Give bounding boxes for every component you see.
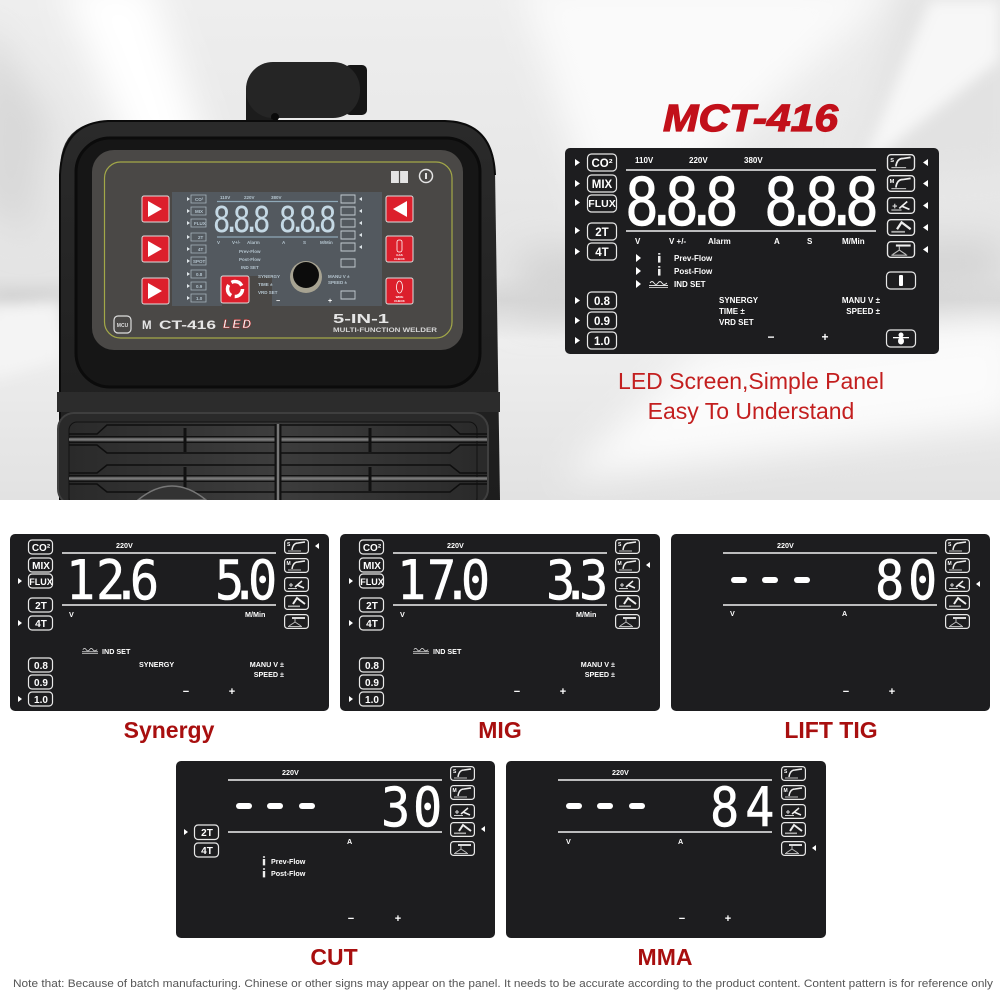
embedded LCD screen: 0.8 [196, 272, 203, 277]
settings labels: MANU V ± [842, 296, 881, 305]
panel: MIG display: + [560, 686, 566, 698]
digits: 8.8.8 [764, 165, 879, 241]
embedded LCD screen: IND SET [241, 265, 259, 270]
red buttons: CHECK [394, 299, 406, 303]
embedded LCD screen: 380V [271, 195, 282, 200]
readout: 5.0 [215, 550, 277, 613]
panel: MIG display: 0.8 [365, 661, 379, 672]
embedded LCD screen: CO² [195, 197, 204, 202]
mode buttons: 1.0 [594, 336, 610, 348]
readout: 17.0 [397, 550, 490, 613]
panel branding: 5-IN-1 [333, 311, 389, 326]
panel: LIFT TIG display: 220V [777, 541, 794, 550]
settings labels: + [821, 330, 829, 344]
embedded LCD screen: 8.8.8 [279, 199, 336, 241]
panel: CUT display: Post-Flow [271, 869, 306, 878]
ventilation grille [58, 413, 488, 506]
embedded LCD screen: M/Min [320, 240, 333, 245]
panel branding [114, 311, 438, 334]
mode buttons: CO² [591, 158, 613, 170]
embedded LCD screen: MIX [195, 209, 203, 214]
unit labels: V +/- [669, 237, 686, 246]
panel: CUT display: 2T [201, 828, 213, 839]
readout [731, 550, 937, 613]
panel branding: MCU [117, 323, 129, 329]
panel: CUT display: + [395, 913, 401, 925]
panel: LIFT TIG display: A [842, 609, 847, 618]
mode buttons: FLUX [588, 198, 616, 210]
embedded LCD screen: SPEED ± [328, 280, 348, 285]
panel: Synergy display: M/Min [245, 610, 265, 619]
settings labels: TIME ± [719, 307, 745, 316]
mode buttons: 0.9 [594, 316, 610, 328]
panel: Synergy display: 0.9 [34, 678, 48, 689]
voltage labels [635, 156, 763, 165]
embedded LCD screen: 8.8.8 [213, 199, 270, 241]
unit labels [635, 237, 865, 246]
captions row 2: CUT [310, 944, 358, 970]
footnote: Note that: Because of batch manufacturing. Chinese or other signs may appear on the panel. It needs to be accurate according to the product content. Content pattern is for reference only [13, 978, 993, 990]
panel: MMA display: V [566, 837, 571, 846]
readout [66, 550, 277, 613]
embedded LCD screen: FLUX [194, 221, 206, 226]
panel: MIG display: − [514, 686, 520, 698]
title: MCT-416: MCT-416 [663, 98, 839, 140]
embedded LCD screen: Post-Flow [239, 257, 261, 262]
panel: CUT display: − [348, 913, 354, 925]
panel: MIG display: IND SET [433, 647, 462, 656]
mode buttons [575, 154, 616, 349]
embedded LCD screen: TIME ± [258, 282, 273, 287]
indicators: Post-Flow [674, 267, 713, 276]
panel: Synergy display: 1.0 [34, 695, 48, 706]
red buttons: CHECK [394, 257, 406, 261]
mode buttons: 2T [595, 227, 609, 239]
panel: Synergy display: MANU V ± [250, 660, 284, 669]
subtitle: LED Screen,Simple Panel [618, 368, 884, 394]
readout: 3.3 [546, 550, 608, 613]
embedded LCD screen: 2T [198, 235, 204, 240]
panel: MIG display: 220V [447, 541, 464, 550]
settings labels: SPEED ± [846, 307, 881, 316]
captions row 1 [124, 717, 878, 743]
captions row 1: LIFT TIG [784, 717, 878, 743]
settings labels: VRD SET [719, 318, 754, 327]
panel: Synergy display: FLUX [29, 577, 53, 587]
knob [290, 261, 322, 293]
panel: Synergy display: + [229, 686, 235, 698]
icon: manual and power [391, 170, 432, 183]
embedded LCD screen: 110V [220, 195, 230, 200]
embedded LCD screen: Prev-Flow [239, 249, 261, 254]
subtitle [618, 368, 884, 424]
panel: Synergy display: CO² [32, 543, 51, 554]
readout: 80 [875, 550, 937, 613]
panel: Synergy display [10, 534, 329, 711]
handle [246, 62, 367, 122]
embedded LCD screen: 1.0 [196, 296, 203, 301]
digits: 8.8.8 [625, 165, 739, 241]
embedded LCD screen [172, 192, 382, 306]
panel: MIG display: CO² [363, 543, 382, 554]
panel: MIG display: M/Min [576, 610, 596, 619]
readout [566, 777, 774, 840]
captions row 1: MIG [478, 717, 522, 743]
indicators: IND SET [674, 280, 706, 289]
panel: LIFT TIG display: V [730, 609, 735, 618]
embedded LCD screen: 0.9 [196, 284, 203, 289]
readout: 12.6 [66, 550, 159, 613]
panel: CUT display: 4T [201, 846, 213, 857]
red buttons: WIRE [396, 295, 403, 299]
embedded LCD screen: MANU V ± [328, 274, 350, 279]
panel: MIG display: SPEED ± [585, 670, 615, 679]
embedded LCD screen: V+/- [232, 240, 241, 245]
voltage labels: 380V [744, 156, 763, 165]
panel branding: CT-416 [159, 318, 216, 332]
panel: main LCD [565, 148, 939, 354]
panel: LIFT TIG display: + [889, 686, 895, 698]
unit labels: S [807, 237, 813, 246]
panel: Synergy display: 0.8 [34, 661, 48, 672]
settings labels [719, 296, 881, 344]
captions row 2 [310, 944, 692, 970]
machine body [57, 121, 500, 500]
panel: MIG display: V [400, 610, 405, 619]
readout [397, 550, 608, 613]
panel: CUT display: 220V [282, 768, 299, 777]
embedded LCD screen: SYNERGY [258, 274, 280, 279]
unit labels: M/Min [842, 237, 865, 246]
panel: MIG display: MANU V ± [581, 660, 615, 669]
panel: Synergy display: IND SET [102, 647, 131, 656]
panel: Synergy display: SPEED ± [254, 670, 284, 679]
embedded LCD screen: Alarm [247, 240, 260, 245]
panel: MIG display: 1.0 [365, 695, 379, 706]
mode buttons: 0.8 [594, 296, 611, 308]
panel: LIFT TIG display [671, 534, 990, 711]
panel: MIG display: 4T [366, 619, 378, 630]
panel: CUT display [176, 761, 495, 938]
subtitle: Easy To Understand [648, 398, 854, 424]
panel: MIG display: 0.9 [365, 678, 379, 689]
red buttons: GAS [396, 253, 403, 257]
voltage labels: 220V [689, 156, 708, 165]
unit labels: A [774, 237, 780, 246]
embedded LCD screen: V [217, 240, 220, 245]
panel branding: MULTI-FUNCTION WELDER [333, 328, 438, 334]
panel: Synergy display: MIX [32, 561, 50, 572]
panel: CUT display: Prev-Flow [271, 857, 306, 866]
process icons [886, 155, 928, 347]
panel: Synergy display: SYNERGY [139, 660, 174, 669]
panel: Synergy display: 2T [35, 601, 47, 612]
panel: MMA display: − [679, 913, 685, 925]
readout: 84 [710, 777, 774, 840]
indicators [636, 253, 713, 289]
settings labels: − [767, 330, 775, 344]
control panel [92, 150, 463, 350]
unit labels: Alarm [708, 237, 731, 246]
panel: CUT display: A [347, 837, 352, 846]
indicators: Prev-Flow [674, 254, 713, 263]
panel: MMA display: A [678, 837, 683, 846]
red buttons [142, 196, 413, 304]
panel: Synergy display: V [69, 610, 74, 619]
embedded LCD screen: A [282, 240, 286, 245]
panel: MIG display: FLUX [360, 577, 384, 587]
mode buttons: 4T [595, 247, 609, 259]
captions row 1: Synergy [124, 717, 215, 743]
mode buttons: MIX [592, 179, 613, 191]
panel branding: LED [223, 317, 251, 331]
embedded LCD screen: 4T [198, 247, 204, 252]
panel: Synergy display: 220V [116, 541, 133, 550]
panel: MMA display [506, 761, 826, 938]
panel: MMA display: 220V [612, 768, 629, 777]
voltage labels: 110V [635, 156, 654, 165]
panel: MIG display [340, 534, 660, 711]
captions row 2: MMA [638, 944, 692, 970]
panel: Synergy display: 4T [35, 619, 47, 630]
embedded LCD screen: − [276, 298, 280, 305]
readout [236, 777, 442, 840]
embedded LCD screen: VRD SET [258, 290, 278, 295]
unit labels: V [635, 237, 641, 246]
panel: MMA display: + [725, 913, 731, 925]
welder machine illustration [57, 62, 500, 506]
embedded LCD screen: SPOT [193, 259, 206, 264]
readout: 30 [381, 777, 442, 840]
panel: MIG display: MIX [363, 561, 381, 572]
panel: LIFT TIG display: − [843, 686, 849, 698]
panel: Synergy display: − [183, 686, 189, 698]
embedded LCD screen: S [303, 240, 306, 245]
digits [625, 165, 879, 241]
embedded LCD screen: 220V [244, 195, 255, 200]
embedded LCD screen: + [328, 298, 332, 305]
panel branding: M [142, 320, 152, 332]
settings labels: SYNERGY [719, 296, 759, 305]
panel: MIG display: 2T [366, 601, 378, 612]
